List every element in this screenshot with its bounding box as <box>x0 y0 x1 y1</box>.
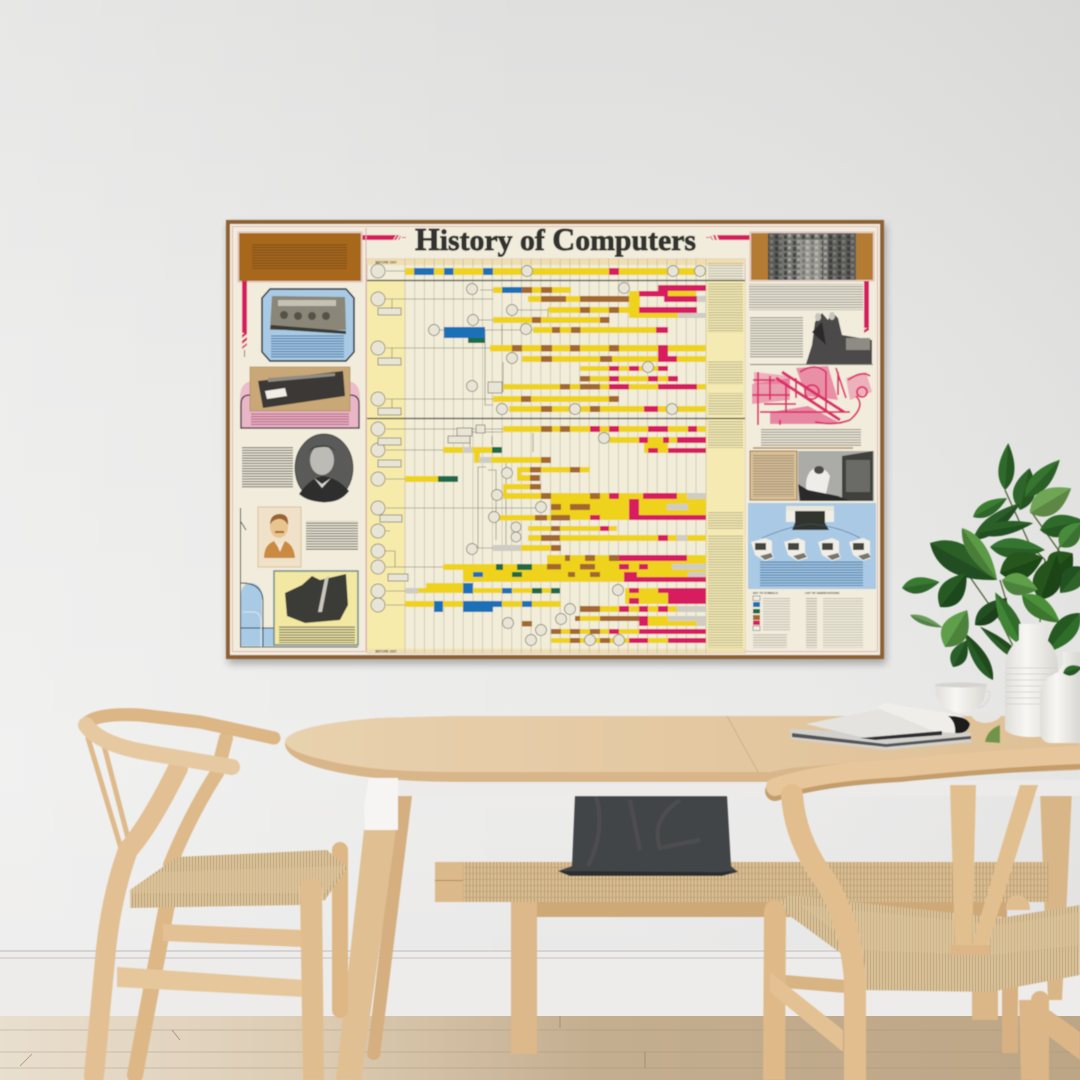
plant stems <box>965 490 1062 660</box>
skirting board <box>0 949 1080 1017</box>
poster shadow <box>228 224 886 664</box>
chart grid <box>405 259 706 653</box>
group: large yellow block <box>493 493 706 551</box>
axis labels: BEFORE 1937 <box>375 650 397 654</box>
table far leg <box>367 796 412 1060</box>
stretcher horizontal <box>785 975 846 993</box>
bench legs and apron <box>511 900 1018 1054</box>
group: wide yellow band with pink <box>443 555 706 582</box>
right legs <box>1019 1000 1080 1080</box>
woven seat <box>130 850 347 908</box>
main post <box>94 768 178 1076</box>
panel: blue terminal network <box>748 503 876 589</box>
top rail <box>88 715 274 738</box>
group: left column nodes <box>371 264 408 612</box>
panel: operators photograph <box>750 312 873 364</box>
panel: blue octagon calculator <box>262 289 354 361</box>
title: History of Computers <box>415 221 696 257</box>
small white bottle vase <box>1040 652 1080 743</box>
terminal 4 <box>849 538 871 561</box>
small fallen leaf <box>985 725 1000 743</box>
panel: pink arch calculator <box>240 367 360 429</box>
connector lines <box>378 271 548 605</box>
chart notes column <box>708 263 743 648</box>
text: right column introduction <box>749 284 863 310</box>
group: first section bars <box>444 285 706 343</box>
terminal 3 <box>818 538 841 561</box>
panel: yellow tabulator <box>274 571 358 645</box>
portrait: Herman Hollerith <box>258 507 301 567</box>
back splat <box>88 738 128 855</box>
front rail <box>86 725 232 767</box>
group: timeline nodes <box>428 266 706 646</box>
curved main post <box>792 795 855 1080</box>
key to symbols: KEY TO SYMBOLS <box>753 591 778 595</box>
back splat <box>950 785 976 945</box>
bench seat <box>435 862 1048 902</box>
terminal 2 <box>784 538 808 561</box>
central computer <box>786 506 834 530</box>
inner post <box>170 738 226 865</box>
portrait: Charles Babbage <box>295 434 353 502</box>
table top <box>285 716 1080 782</box>
key to symbols <box>753 591 790 648</box>
timeline chart <box>367 259 745 654</box>
far legs <box>1031 1000 1049 1080</box>
plant leaves <box>901 443 1080 684</box>
left chair <box>86 715 347 1080</box>
poster frame <box>226 220 884 659</box>
arm rail <box>775 755 1080 787</box>
photo: tabulating machine <box>285 574 348 623</box>
dark cushion <box>558 796 738 876</box>
rear leg and right post <box>135 850 340 1075</box>
pink title flourish right <box>706 235 750 240</box>
stretchers <box>163 924 302 947</box>
illustration: pink factory line art <box>752 366 872 425</box>
photo: desktop calculator <box>258 371 345 408</box>
pink vertical bar left <box>242 281 247 357</box>
right chair <box>763 755 1080 1080</box>
magazine and book <box>790 703 971 750</box>
group: second section bars <box>490 345 706 412</box>
panel: computer room photograph <box>750 232 874 281</box>
pink title flourish left <box>362 235 406 240</box>
arm rail shadow <box>775 759 1080 791</box>
group: lower section bars <box>405 583 706 643</box>
bench <box>435 862 1048 1054</box>
axis labels <box>375 260 397 654</box>
front leg <box>763 900 786 1080</box>
section rules <box>367 280 745 418</box>
text: Hollerith biography <box>306 521 358 550</box>
divider <box>365 228 367 651</box>
axis labels: BEFORE 1937 <box>375 260 397 264</box>
large white vase <box>1005 624 1058 737</box>
coffee cup and saucer <box>935 682 1003 723</box>
table back leg right <box>1040 790 1072 1000</box>
foreground leaf <box>1062 662 1080 678</box>
panel: tan text box and photograph <box>750 448 874 501</box>
woven seat <box>775 895 1080 992</box>
framed poster: History of Computers <box>86 220 1080 1080</box>
row: top band <box>405 268 706 275</box>
panel: intro text box <box>238 232 362 282</box>
pink vertical bar right <box>864 281 869 333</box>
list of abbreviations <box>805 591 863 648</box>
list of abbreviations: LIST OF ABBREVIATIONS <box>805 591 839 595</box>
photo: mechanical calculator <box>270 296 346 334</box>
table white apron <box>400 780 1080 796</box>
terminal 1 <box>751 538 774 561</box>
table front leg <box>336 778 398 1080</box>
diagonal stretcher <box>770 972 843 1052</box>
seat knob <box>1006 895 1030 910</box>
decorative blue architecture <box>240 508 358 647</box>
text: Babbage biography <box>242 447 293 488</box>
text: pink illustration caption <box>761 429 861 446</box>
group: third section bars <box>405 426 706 499</box>
front leg <box>300 878 324 1080</box>
wooden floor <box>0 1016 1080 1080</box>
